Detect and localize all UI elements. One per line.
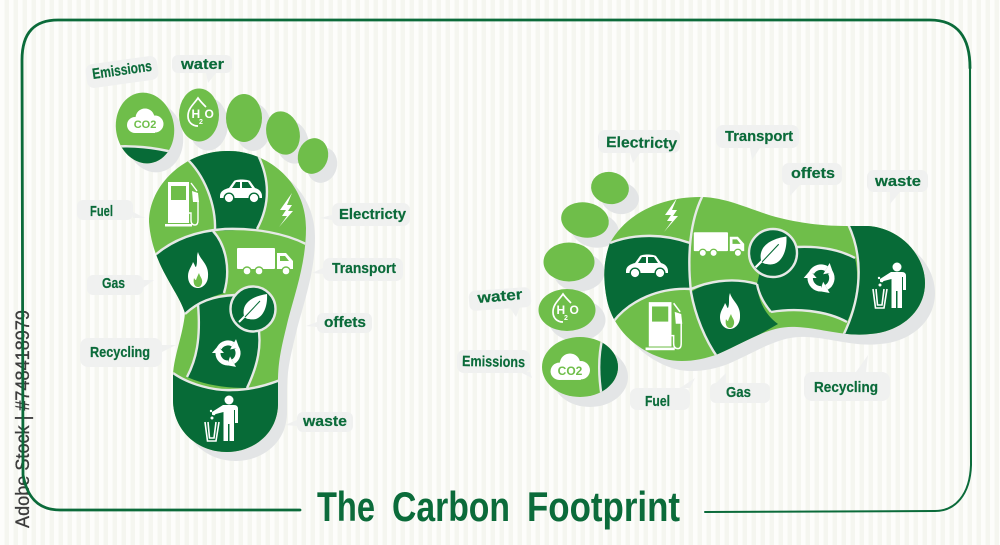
title: Footprint	[527, 483, 680, 530]
icon: H2O drop: H	[192, 107, 200, 121]
icon: recycling	[802, 263, 839, 296]
label: Fuel: Fuel	[90, 203, 113, 220]
toe 3	[226, 94, 262, 142]
label: Gas: Gas	[102, 275, 125, 292]
label: Recycling: Recycling	[90, 344, 150, 361]
label: offets	[306, 313, 372, 333]
title: Carbon	[392, 483, 510, 530]
label: Gas: Gas	[726, 384, 751, 401]
icon: flame	[720, 293, 740, 329]
toe 3	[544, 242, 594, 282]
label: waste: waste	[302, 413, 347, 430]
left foot segments	[149, 151, 306, 452]
label: Emissions: Emissions	[462, 353, 525, 371]
icon: lightning bolt	[664, 198, 678, 232]
label: waste	[867, 170, 928, 204]
icon: H2O drop: 2	[199, 119, 203, 126]
label: Water	[172, 55, 232, 83]
label: Transport: Transport	[332, 260, 396, 277]
icon: car	[626, 254, 668, 278]
label: Transport	[716, 125, 799, 160]
label: offets: offets	[791, 165, 835, 182]
right footprint shadow	[548, 179, 935, 407]
right foot labels	[457, 125, 928, 410]
label: Gas	[87, 275, 154, 295]
label: Transport: Transport	[725, 128, 793, 145]
icon: leaf badge	[749, 229, 797, 277]
icon: H2O drop: H	[556, 303, 565, 317]
icon: H2O drop: O	[570, 303, 579, 317]
toe 5	[589, 169, 631, 207]
left footprint	[110, 88, 341, 461]
toe: water	[538, 289, 596, 331]
label: Fuel	[77, 200, 145, 220]
icon: fuel pump	[646, 302, 682, 350]
toe 5	[294, 135, 332, 177]
icon: CO2 cloud: CO2	[134, 119, 156, 131]
toe 4	[558, 199, 612, 241]
label: Transport	[312, 258, 403, 281]
title	[317, 483, 680, 530]
label: Water: water	[476, 286, 523, 307]
title: The	[317, 483, 375, 530]
label: Fuel: Fuel	[645, 393, 670, 410]
icon: H2O drop: 2	[564, 315, 568, 322]
label: Emissions	[457, 350, 532, 378]
icon: truck	[694, 232, 744, 256]
label: offets	[782, 163, 842, 196]
icon: person and bin	[205, 396, 238, 441]
icon: H2O drop	[188, 98, 214, 126]
toe: emissions	[542, 337, 618, 397]
left foot labels	[77, 55, 410, 432]
icon: CO2 cloud: CO2	[558, 364, 583, 378]
toe: emissions	[116, 92, 174, 164]
toe 4	[261, 107, 305, 159]
label: Water	[468, 286, 532, 317]
label: Water: water	[180, 56, 224, 73]
label: Gas	[710, 373, 770, 403]
icon: car	[220, 180, 262, 203]
icon: recycling	[210, 339, 244, 370]
label: Recycling: Recycling	[814, 379, 878, 396]
label: Emissions: Emissions	[91, 58, 153, 83]
icon: person and bin	[873, 262, 906, 308]
icon: truck	[237, 248, 293, 275]
icon: H2O drop: O	[204, 107, 214, 121]
label: Electricty: Electricty	[339, 206, 407, 223]
vertical stock id text: Adobe Stock | #748418979	[13, 310, 34, 528]
label: Emissions	[85, 55, 159, 89]
toe: water	[179, 88, 219, 142]
icon: lightning bolt	[279, 193, 293, 227]
label: offets: offets	[324, 314, 366, 331]
label: Electricty	[598, 130, 680, 163]
label: waste: waste	[874, 173, 921, 190]
label: Recycling	[80, 338, 176, 367]
left footprint shadow	[119, 97, 341, 461]
label: Electricty	[320, 203, 410, 226]
right foot segments	[604, 197, 925, 361]
label: Electricty: Electricty	[606, 134, 678, 152]
icon: flame	[188, 252, 208, 288]
right footprint	[538, 169, 935, 407]
icon: fuel pump	[165, 182, 199, 226]
label: Fuel	[630, 378, 695, 410]
label: Recycling	[804, 355, 890, 401]
label: waste	[285, 412, 353, 432]
icon: leaf badge	[230, 286, 276, 332]
icon: H2O drop	[553, 294, 579, 322]
